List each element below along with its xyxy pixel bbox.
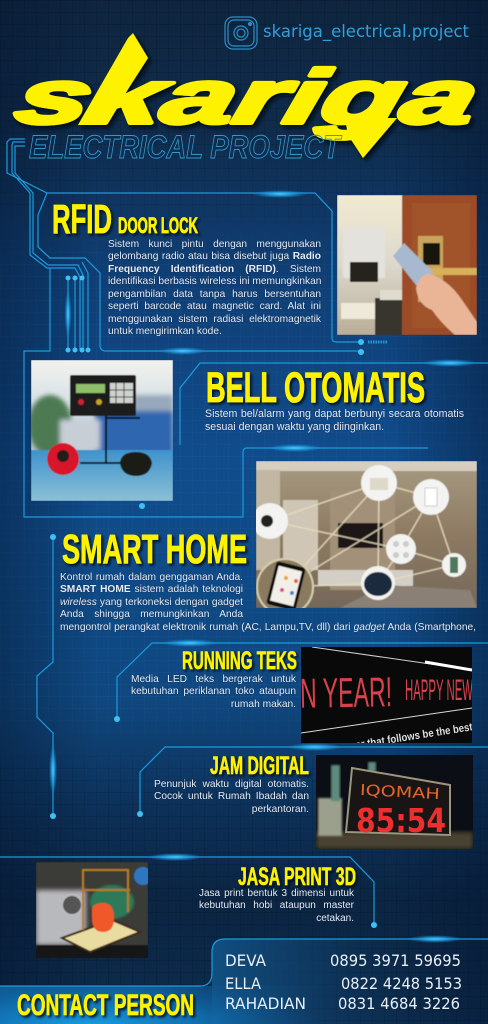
text: smart home description: wireless yang terkoneksi dengan gadget bbox=[60, 597, 243, 608]
text: jam digital description: Cocok untuk Rumah Ibadah dan bbox=[154, 791, 309, 802]
text: bell description bbox=[205, 408, 464, 433]
text: smart home description: mengontrol perangkat elektronik rumah (AC, Lampu,TV, dll) dari gadget Anda (Smartphone, bbox=[60, 622, 476, 633]
logo subtitle: ELECTRICAL PROJECT bbox=[29, 129, 342, 165]
heading: smart home: SMART HOME bbox=[62, 526, 247, 572]
text: running teks description: Media LED teks bergerak untuk bbox=[131, 674, 296, 685]
text: RFID description: seperti barcode atau magnetic card. Alat ini bbox=[108, 301, 321, 312]
photo: running text bbox=[301, 647, 472, 743]
text: jam digital description bbox=[154, 779, 309, 815]
text: jam digital description: Penunjuk waktu digital otomatis. bbox=[154, 779, 309, 790]
text: RFID description: identifikasi berbasis wireless ini memungkinkan bbox=[108, 276, 321, 287]
text: jasa print description: cetakan. bbox=[316, 913, 354, 924]
instagram handle: skariga_electrical.project bbox=[263, 22, 469, 42]
text: jasa print description: Jasa print bentuk 3 dimensi untuk bbox=[199, 888, 354, 899]
contact list: DEVA bbox=[225, 951, 266, 970]
contact list: RAHADIAN bbox=[225, 994, 306, 1013]
heading: jam digital: JAM DIGITAL bbox=[210, 752, 309, 780]
text: RFID description: untuk mengirimkan kode. bbox=[108, 326, 222, 337]
text: jasa print description: kebutuhan hobi ataupun master bbox=[199, 900, 354, 911]
text: running teks description: kebutuhan periklanan toko ataupun bbox=[131, 686, 296, 697]
heading: RFID door lock: DOOR LOCK bbox=[118, 213, 198, 238]
contact list: ELLA bbox=[225, 974, 261, 993]
icon: instagram bbox=[225, 17, 257, 49]
contact list bbox=[225, 951, 462, 1013]
photo: smart home bbox=[252, 461, 477, 615]
text: RFID description: Frequency Identification (RFID). Sistem bbox=[108, 264, 321, 275]
text: RFID description bbox=[108, 239, 322, 337]
text: smart home description bbox=[60, 572, 476, 633]
heading: RFID door lock bbox=[52, 196, 198, 242]
photo: digital clock bbox=[316, 755, 473, 849]
text: jam digital description: perkantoran. bbox=[252, 804, 309, 815]
text: smart home description: Kontrol rumah dalam genggaman Anda. bbox=[60, 572, 243, 583]
photo: running text: N YEAR! bbox=[300, 668, 392, 717]
text: smart home description: Anda shingga memungkinkan Anda bbox=[60, 609, 243, 620]
contact list: 0895 3971 59695 bbox=[330, 951, 461, 970]
text: bell description: Sistem bel/alarm yang dapat berbunyi secara otomatis bbox=[205, 408, 464, 420]
text: running teks description bbox=[131, 674, 296, 710]
photo: RFID door lock bbox=[337, 195, 477, 335]
photo: digital clock: IQOMAH bbox=[359, 781, 440, 803]
contact list: 0831 4684 3226 bbox=[338, 994, 460, 1013]
heading: contact person: CONTACT PERSON bbox=[17, 989, 194, 1022]
text: jasa print description bbox=[199, 888, 354, 924]
text: bell description: sesuai dengan waktu yang diinginkan. bbox=[205, 421, 384, 433]
heading: RFID door lock: RFID bbox=[52, 196, 112, 242]
text: RFID description: gelombang radio atau bisa disebut juga Radio bbox=[108, 251, 321, 262]
photo: bell otomatis bbox=[28, 360, 173, 501]
heading: jasa print 3D: JASA PRINT 3D bbox=[238, 863, 356, 891]
photo: digital clock: 85:54 bbox=[356, 801, 446, 840]
text: RFID description: Sistem kunci pintu dengan menggunakan bbox=[108, 239, 321, 250]
logo: skariga: skariga bbox=[8, 54, 487, 139]
contact list: 0822 4248 5153 bbox=[341, 974, 462, 993]
text: RFID description: pengambilan data tanpa harus bersentuhan bbox=[108, 289, 321, 300]
text: smart home description: SMART HOME sistem adalah teknologi bbox=[60, 584, 243, 595]
text: running teks description: rumah makan. bbox=[231, 699, 296, 710]
heading: running teks: RUNNING TEKS bbox=[182, 647, 297, 675]
text: RFID description: menggunakan sistem radiasi elektromagnetik bbox=[108, 314, 321, 325]
photo: 3D printer bbox=[36, 862, 152, 958]
logo: skariga bbox=[8, 33, 487, 158]
